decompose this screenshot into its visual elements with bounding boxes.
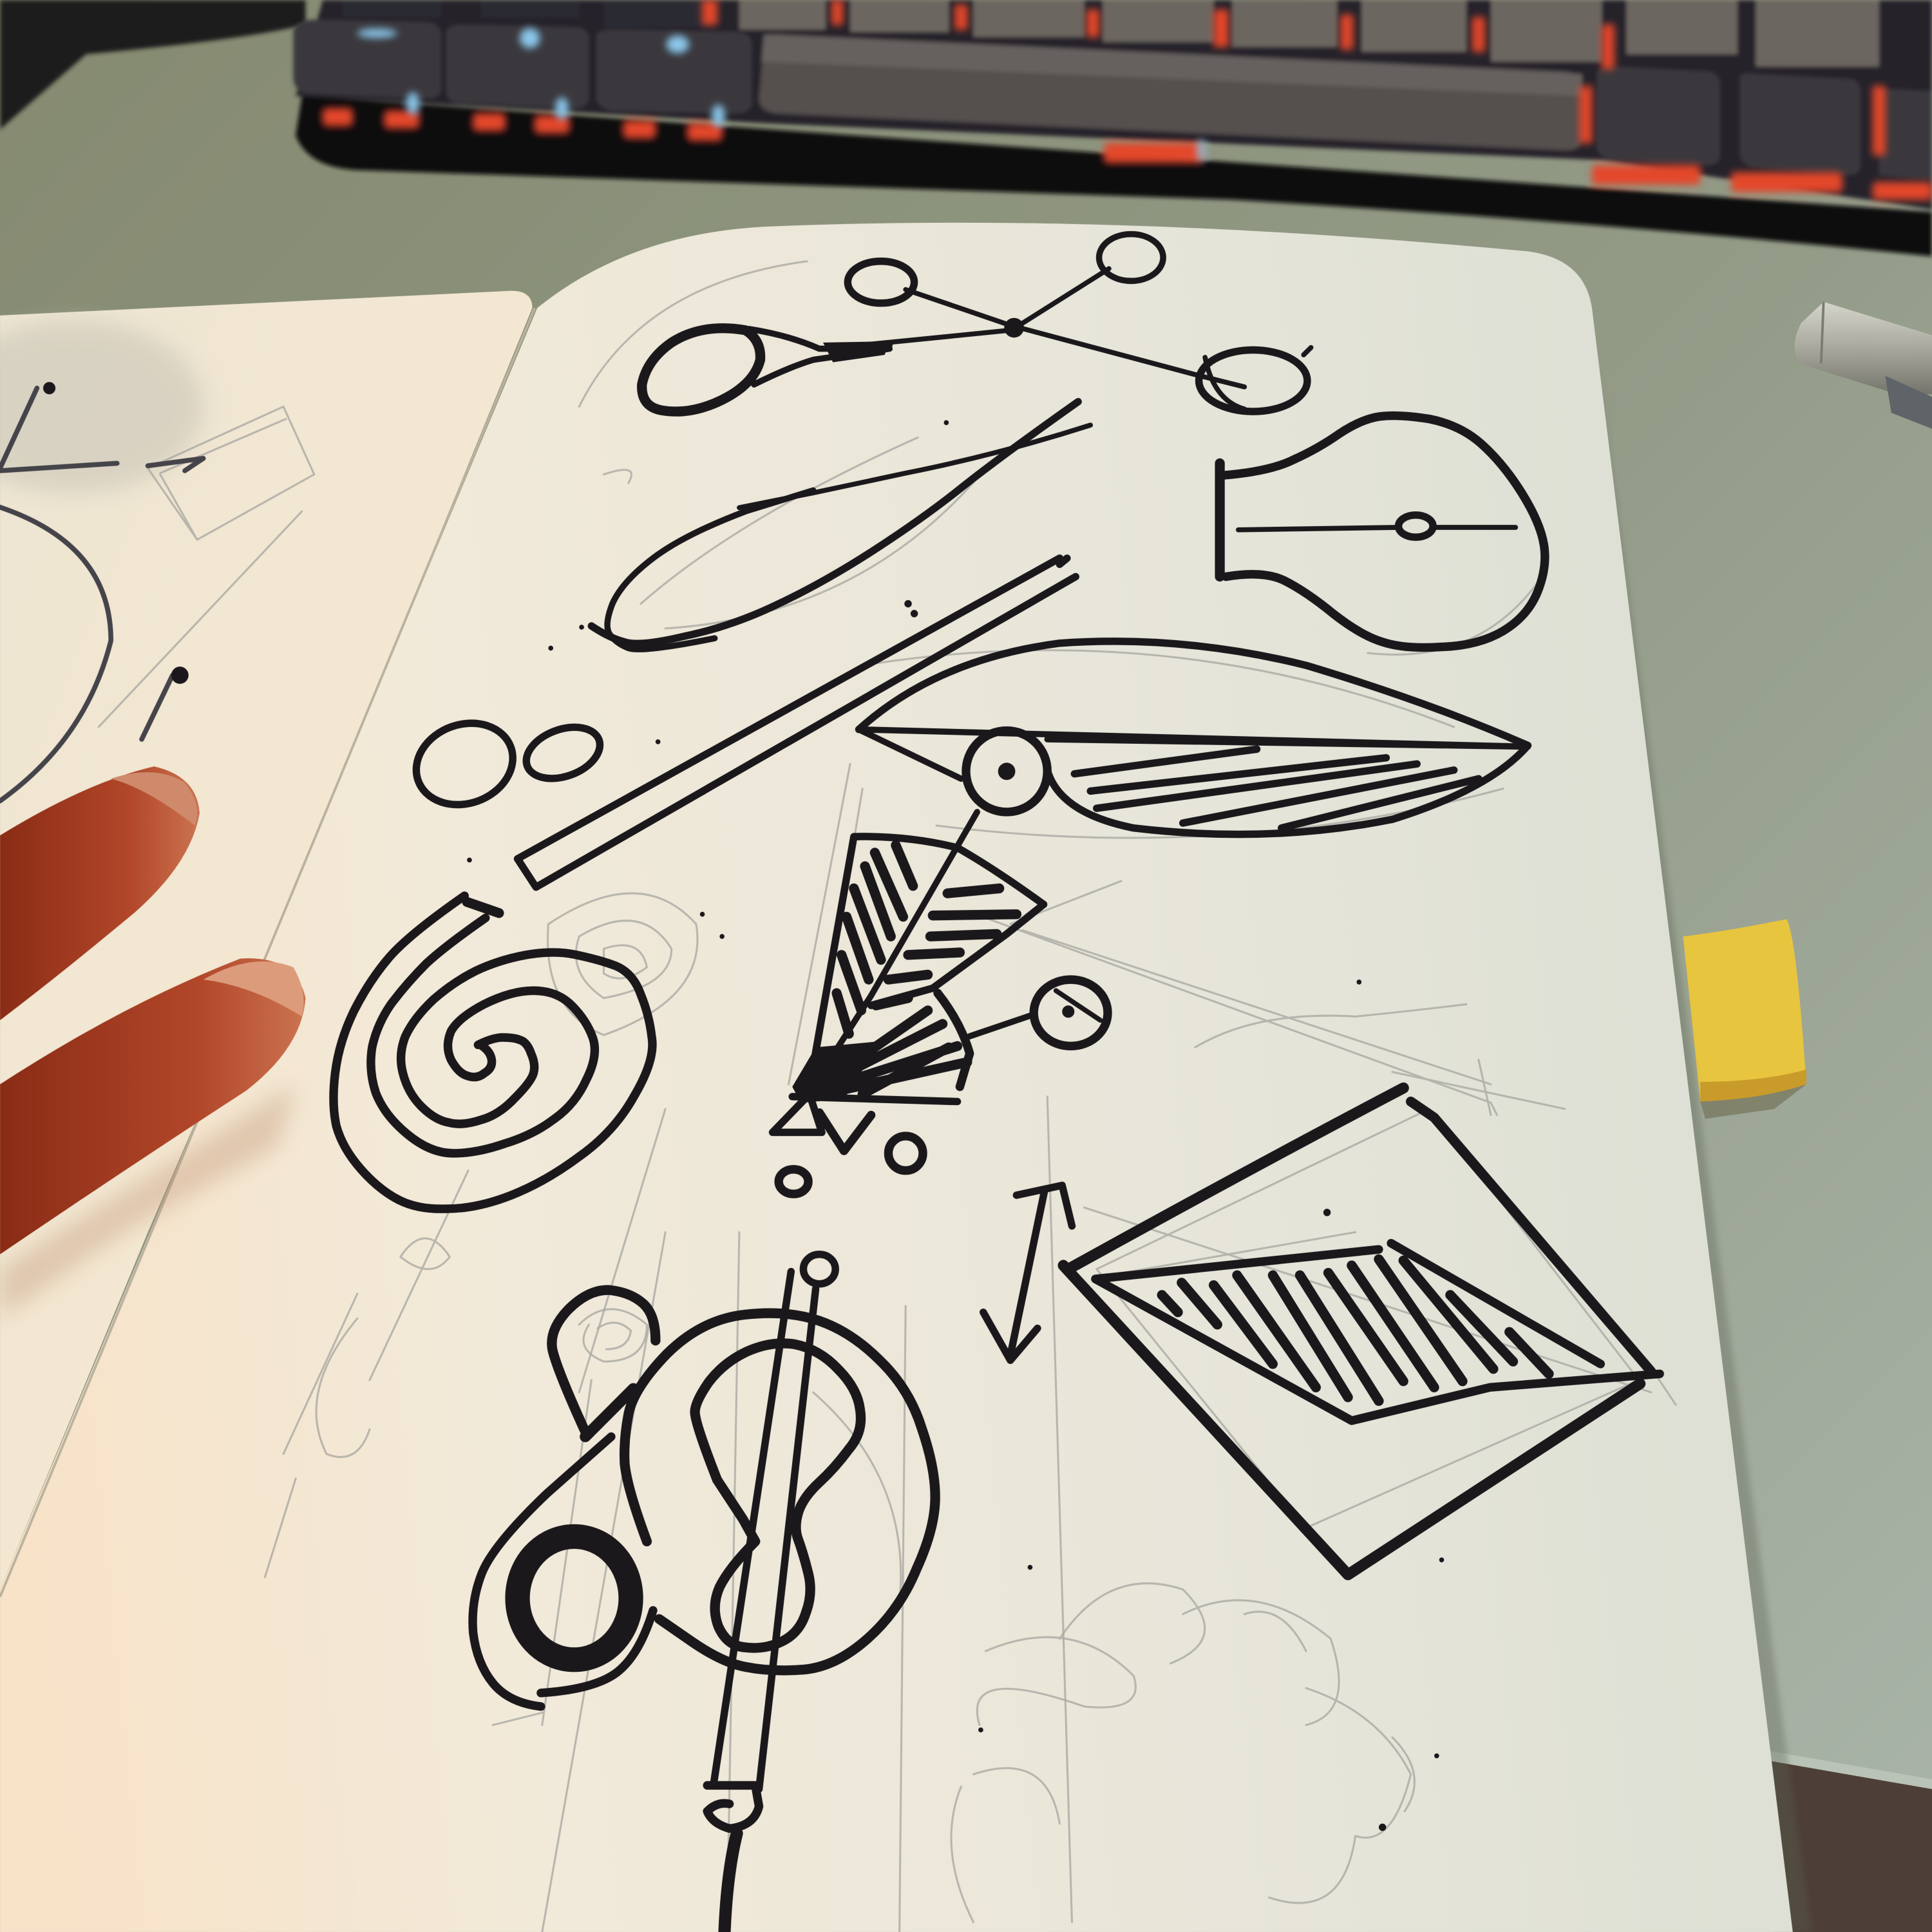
notebook page shadow xyxy=(1589,296,1811,1932)
binding seam xyxy=(0,308,535,1597)
hand with two fingers xyxy=(0,766,305,1318)
keyboard xyxy=(293,0,1932,256)
finger shadow xyxy=(0,1084,296,1318)
lower fingernail xyxy=(204,961,304,1016)
lower finger xyxy=(0,958,305,1255)
left page pencil and ink marks xyxy=(0,320,314,801)
drawing: spiral xyxy=(334,896,652,1209)
yellow elastic bookmark xyxy=(1683,919,1806,1119)
drawing: bulb with dial xyxy=(1220,415,1545,647)
blue key legends xyxy=(357,28,1206,162)
upper fingernail xyxy=(111,772,198,826)
metal pen on desk xyxy=(1795,302,1932,429)
drawing: small ovals xyxy=(404,710,607,818)
upper key row xyxy=(739,0,1879,66)
drawing: crossing sticks with circles xyxy=(642,234,1311,412)
keyboard base xyxy=(296,96,1932,256)
drawing: large lens with hatching xyxy=(859,641,1528,835)
space bar xyxy=(759,34,1582,150)
upper finger xyxy=(0,766,200,1020)
orange backlit switches xyxy=(323,0,1932,200)
pencil underdrawing on right page xyxy=(265,261,1676,1932)
left notebook page xyxy=(0,291,533,1589)
drawing: long diagonal bar xyxy=(518,558,1075,887)
drawing: diamond with hatched core xyxy=(1063,1088,1660,1575)
dark object at top left xyxy=(0,0,305,129)
keyboard top plate xyxy=(296,0,1932,209)
desk front edge xyxy=(1762,1759,1932,1932)
drawing: double arrow xyxy=(983,1186,1072,1360)
drawing: violin-like assembly xyxy=(473,1255,935,1932)
drawing: leaf with long stem xyxy=(591,402,1090,649)
keycaps xyxy=(293,20,1932,180)
drawing: hatched fan shapes xyxy=(773,812,1108,1194)
ink specks xyxy=(467,420,1444,1831)
